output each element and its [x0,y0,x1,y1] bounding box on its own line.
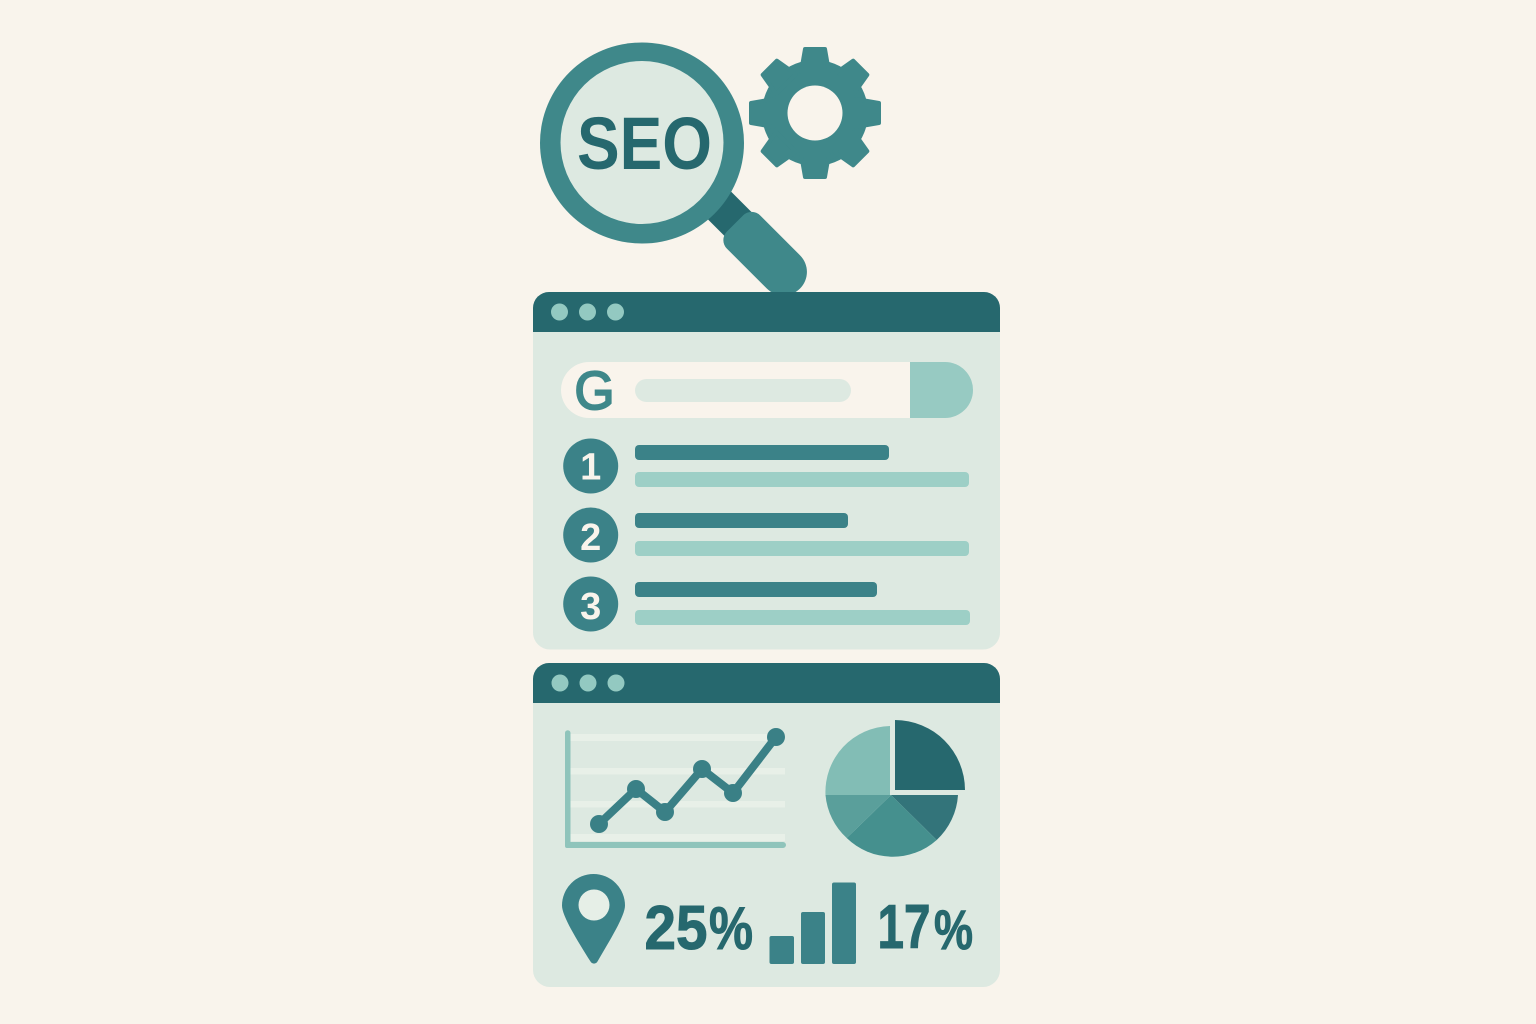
result 1: 1 [580,446,601,488]
panel: search results browser window [533,292,1000,650]
search button [910,362,973,418]
result 1 [563,438,969,494]
window title bar [533,292,1000,332]
stat: 25%: % [709,895,753,962]
result 2: 2 [580,517,601,559]
window control dots [551,304,624,320]
icon: G logo: G [574,361,614,421]
stat: 17%: 17 [878,893,930,962]
magnifier ring [540,42,744,244]
window control dots [552,674,624,692]
result 3 [563,576,970,632]
search bar [561,361,973,421]
SEO label: SEO [577,102,712,185]
icon: magnifying glass with SEO [540,42,817,305]
stat: 17%: % [934,898,973,961]
magnifier handle [712,198,817,305]
window title bar [533,663,1000,703]
window body [533,663,1000,987]
pie chart [825,720,965,857]
panel: analytics browser window [533,663,1000,987]
result 2 [563,508,969,562]
search input placeholder [635,379,851,402]
stat: 25% [644,894,753,963]
line chart [565,728,786,848]
result 3: 3 [580,586,601,628]
window body [533,292,1000,650]
magnifier lens [560,61,724,224]
stat: 25%: 25 [644,894,708,963]
icon: gear [751,49,879,177]
icon: location pin [562,874,625,964]
icon: bar chart [770,882,856,964]
